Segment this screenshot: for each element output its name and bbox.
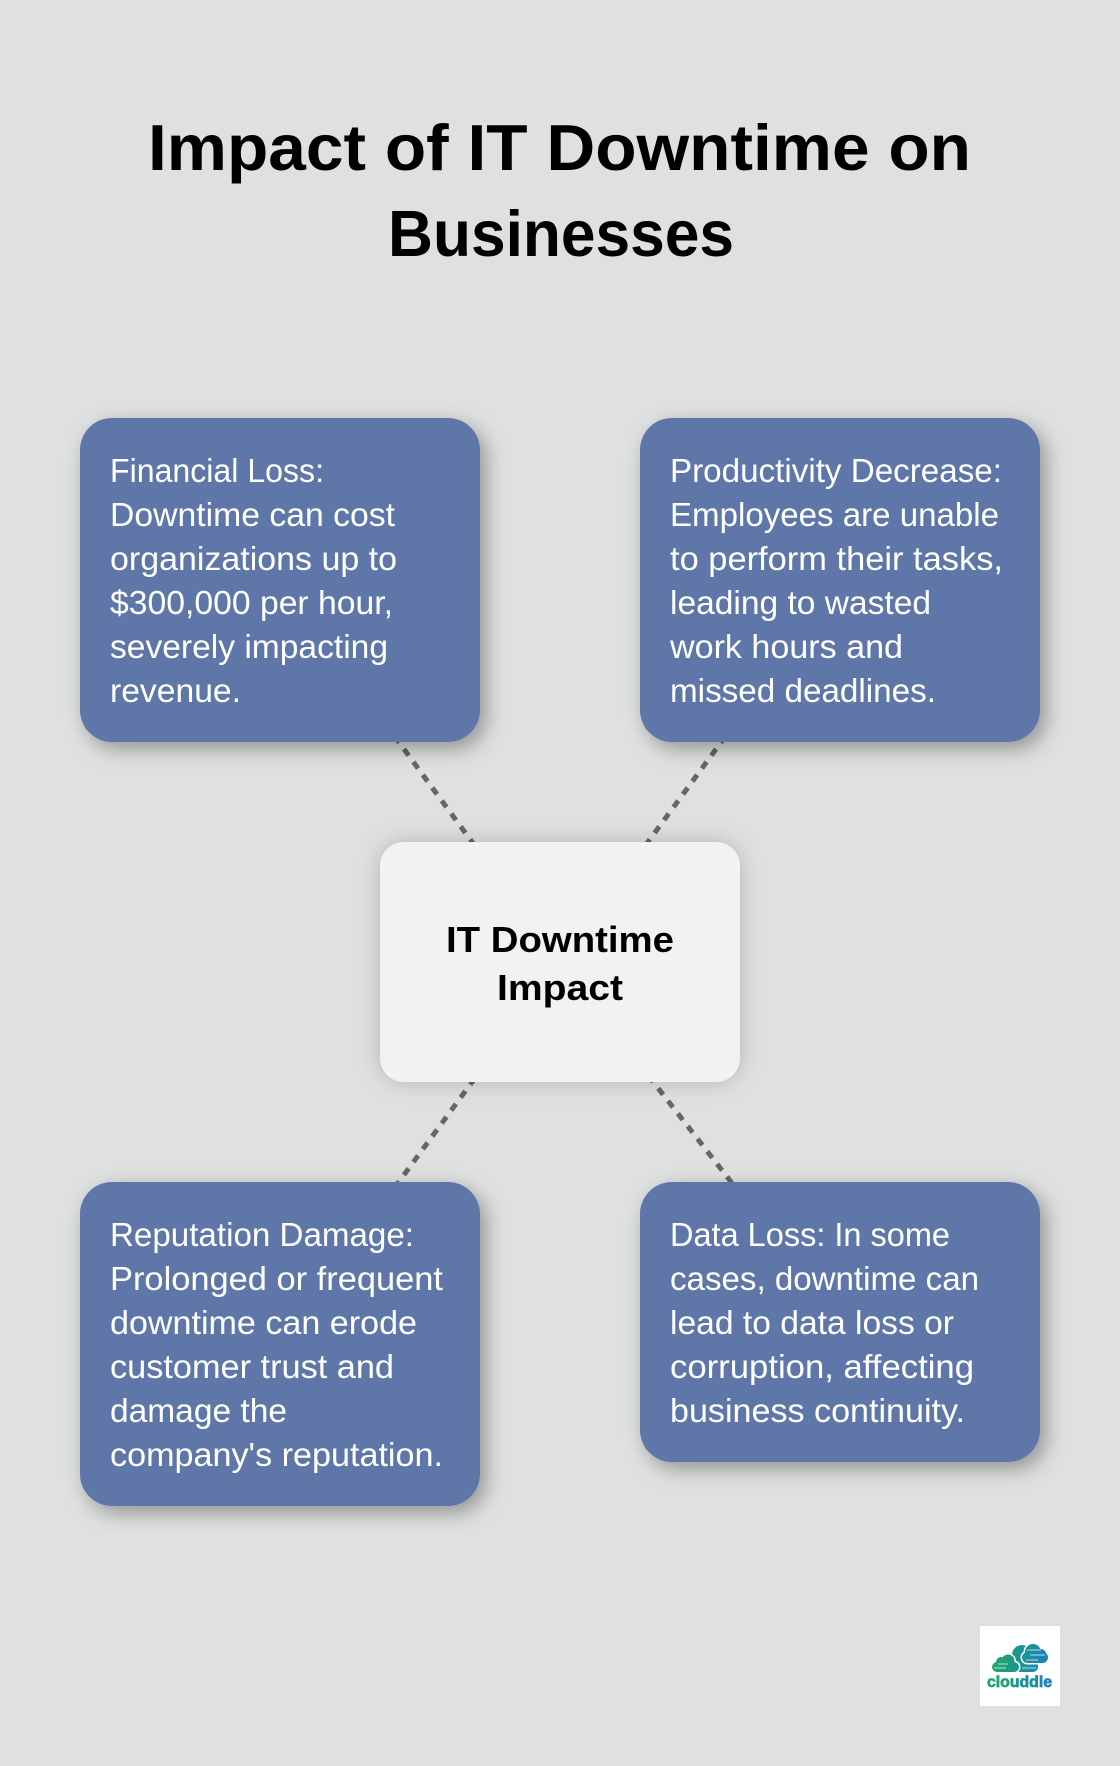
panel: financial loss (80, 418, 480, 742)
text: reputation damage: customer trust and (110, 1348, 394, 1385)
heading: it downtime impact (446, 919, 674, 1008)
title: Businesses (388, 197, 734, 270)
panel: reputation damage (80, 1182, 480, 1506)
panel: productivity decrease (640, 418, 1040, 742)
icon: clouds (992, 1644, 1048, 1672)
text: financial loss: severely impacting (110, 628, 388, 665)
text: financial loss: Financial Loss: (110, 452, 324, 489)
text: financial loss: Downtime can cost (110, 496, 395, 533)
text: reputation damage: damage the (110, 1392, 287, 1429)
text: productivity decrease: missed deadlines. (670, 672, 936, 709)
title: Impact of IT Downtime on (148, 111, 971, 184)
panel: data loss (640, 1182, 1040, 1462)
text: data loss: corruption, affecting (670, 1348, 974, 1385)
text: data loss: business continuity. (670, 1392, 965, 1429)
text: productivity decrease (669, 452, 1003, 709)
text: financial loss (110, 452, 397, 709)
text: reputation damage: Prolonged or frequent (110, 1260, 443, 1297)
heading: it downtime impact: Impact (497, 967, 623, 1008)
text: productivity decrease: leading to wasted (670, 584, 931, 621)
text: data loss (670, 1216, 979, 1429)
text: productivity decrease: Productivity Decrease: (670, 452, 1002, 489)
text: reputation damage (110, 1216, 443, 1473)
dashed connectors from centre hub to the four cards (280, 580, 840, 1344)
text: data loss: Data Loss: In some (670, 1216, 950, 1253)
text: data loss: lead to data loss or (670, 1304, 954, 1341)
text: productivity decrease: work hours and (669, 628, 903, 665)
text: reputation damage: company's reputation. (110, 1436, 443, 1473)
text: productivity decrease: to perform their tasks, (670, 540, 1003, 577)
title (148, 111, 971, 270)
panel: centre hub (380, 842, 740, 1082)
text: financial loss: $300,000 per hour, (110, 584, 393, 621)
heading: it downtime impact: IT Downtime (446, 919, 674, 960)
text: reputation damage: downtime can erode (110, 1304, 417, 1341)
text: financial loss: revenue. (110, 672, 241, 709)
logo: clouddle (980, 1626, 1060, 1706)
text: financial loss: organizations up to (110, 540, 397, 577)
text: productivity decrease: Employees are unable (670, 496, 999, 533)
text: data loss: cases, downtime can (670, 1260, 979, 1297)
text: reputation damage: Reputation Damage: (110, 1216, 414, 1253)
logo wordmark: clouddle (987, 1674, 1052, 1691)
